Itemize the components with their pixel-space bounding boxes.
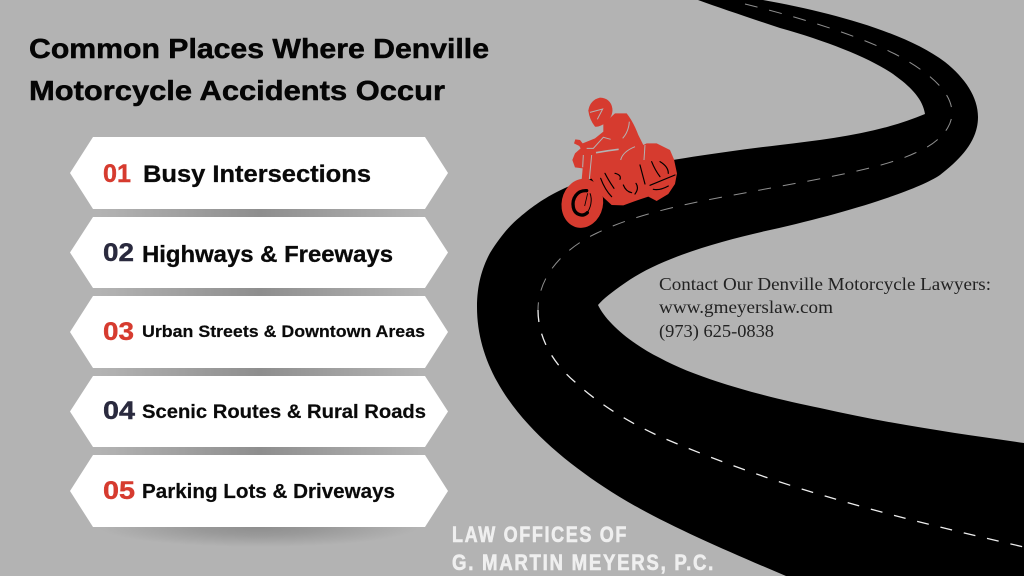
title: Common Places Where Denville (29, 33, 489, 64)
list item 1 (70, 137, 448, 209)
contact text (659, 274, 991, 342)
contact text: www.gmeyerslaw.com (659, 297, 833, 317)
title: Motorcycle Accidents Occur (29, 75, 445, 106)
law offices logo text: LAW OFFICES OF (452, 522, 628, 547)
list item 4: Scenic Routes & Rural Roads (142, 401, 426, 423)
icon detail: engine and exhaust lines (601, 162, 675, 197)
icon detail: front wheel hub (573, 191, 591, 215)
list item 4 (70, 376, 448, 447)
icon: motorcycle rider (557, 98, 677, 232)
road (477, 0, 1024, 576)
list item 3 (70, 296, 448, 368)
law offices logo text (452, 522, 715, 575)
list item 5: Parking Lots & Driveways (142, 481, 395, 503)
shadows under list items (99, 209, 420, 547)
list item 2: Highways & Freeways (142, 241, 393, 267)
contact text: (973) 625-0838 (659, 321, 774, 342)
law offices logo text: G. MARTIN MEYERS, P.C. (452, 550, 715, 575)
title (29, 33, 489, 106)
list item 1: Busy Intersections (143, 161, 371, 188)
list item 2 (70, 217, 448, 288)
list item 2: 02 (103, 239, 134, 267)
list item 1: 01 (103, 160, 131, 188)
list item 5 (70, 455, 448, 527)
list item 4: 04 (103, 397, 135, 425)
contact text: Contact Our Denville Motorcycle Lawyers: (659, 274, 991, 294)
list item 3: Urban Streets & Downtown Areas (142, 322, 425, 341)
list item 5: 05 (103, 477, 135, 505)
list item 3: 03 (103, 318, 134, 346)
icon detail: helmet visor and gaps (583, 109, 645, 179)
